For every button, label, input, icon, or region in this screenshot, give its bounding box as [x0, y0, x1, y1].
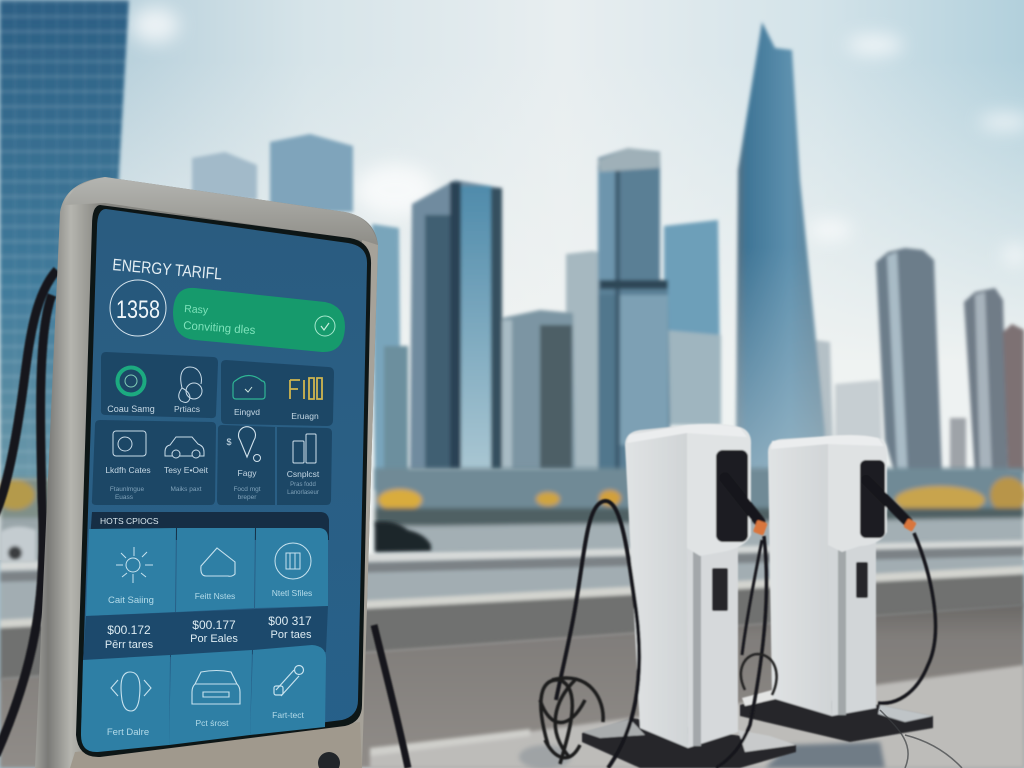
options panel lower: [81, 512, 329, 752]
horizon: trees and far ground: [0, 468, 1024, 564]
price row: [83, 606, 328, 660]
card: energy: [221, 360, 334, 426]
card: energy: Eingvd: [234, 407, 260, 417]
card: climate charges: Lkdfh Cates: [105, 465, 151, 475]
options header: [90, 512, 329, 540]
arched cable and coil: [556, 501, 639, 768]
socket slot: [716, 450, 748, 542]
rail shadow band: [0, 546, 1024, 582]
screen bezel: [76, 205, 371, 757]
price row: $00 317: [268, 614, 312, 628]
building: pale distant blocks: [192, 134, 966, 470]
small cable loop: [741, 654, 777, 695]
price row: Pērr tares: [105, 639, 154, 651]
charger casing: [35, 177, 378, 768]
price row: $00.177: [192, 618, 236, 632]
tower with glass facade: [410, 180, 502, 470]
card: pricing pin: Focd mgt: [233, 486, 261, 493]
icon: house: [201, 548, 235, 576]
lower body: [687, 545, 738, 748]
plug: [725, 478, 760, 522]
lower body: [828, 540, 876, 716]
deck between rail and wall: [0, 540, 1024, 630]
charger: left pedestal: [540, 424, 796, 768]
card: climate charges: Euass: [115, 494, 134, 501]
building: tall glass tower left: [0, 0, 129, 480]
card: capital: [277, 427, 332, 505]
city skyline: [0, 0, 1024, 490]
icon: wrench: [274, 666, 304, 696]
base: [582, 718, 796, 768]
options header: HOTS CPIOCS: [100, 516, 159, 526]
readout circle: [110, 280, 166, 336]
card: climate charges: Ftaunlmgue: [110, 486, 145, 493]
option row 1: Feitt Nstes: [195, 591, 235, 601]
option row 3: Fert Dalre: [107, 727, 149, 738]
option row 1: Ntetl Sfiles: [272, 588, 312, 598]
road: [0, 604, 1024, 768]
lower slot: [856, 562, 868, 598]
building: right towers: [876, 248, 1024, 485]
tariff cards upper: [92, 352, 334, 505]
pavement shadows: [519, 742, 885, 768]
rail top: [0, 540, 1024, 570]
socket slot: [860, 460, 885, 538]
wall cap: [0, 566, 1024, 628]
charger: right pedestal: [740, 435, 936, 742]
readout circle: 1358: [116, 296, 160, 324]
card: cost saving: [101, 352, 218, 418]
card: cost saving: Prtiacs: [174, 404, 200, 414]
card: capital: Pras fodd: [290, 482, 316, 488]
wall face: [0, 574, 1024, 680]
plug and cable: [866, 480, 908, 522]
card: climate charges: Maiks paxt: [170, 486, 202, 493]
option row 1: [86, 528, 328, 616]
screen: [81, 209, 367, 751]
lower slot: [712, 568, 728, 611]
card: cost saving: Coau Samg: [107, 404, 155, 414]
building: mid left towers: [372, 180, 600, 490]
green status pill: [173, 288, 345, 352]
main charger unit: [35, 177, 378, 768]
pavement: [370, 665, 1024, 768]
clouds: [131, 7, 1024, 265]
button: [318, 752, 340, 768]
card: pricing pin: $: [226, 437, 232, 447]
card: capital: Lanorlaseur: [287, 490, 319, 496]
building: spire skyscraper: [736, 22, 825, 472]
head: [687, 424, 751, 556]
card: pricing pin: breper: [238, 494, 257, 501]
card: pricing pin: Fagy: [238, 468, 257, 478]
black cables behind main charger: [0, 270, 408, 768]
title: ENERGY TARIFL: [112, 256, 223, 284]
option row 3: [81, 645, 326, 752]
price row: Por Eales: [190, 633, 238, 645]
icon: circle badge: [275, 543, 311, 579]
parked cars: [0, 521, 431, 562]
icon: car front: [192, 670, 240, 704]
guard rail and concrete wall: [0, 540, 1024, 680]
left face: [625, 425, 688, 748]
icon: sun: [116, 547, 153, 583]
base: [740, 690, 933, 742]
green status pill: Conviting dles: [183, 320, 256, 337]
option row 3: Pct śrost: [195, 718, 229, 728]
price row: $00.172: [107, 623, 151, 637]
option row 3: Fart-tect: [272, 710, 304, 720]
cable shadows on pavement: [880, 710, 962, 768]
card: climate charges: [92, 420, 216, 505]
option row 1: Cait Saiing: [108, 595, 154, 606]
icon: bulb outline: [111, 672, 151, 711]
green status pill: Rasy: [184, 303, 209, 317]
card: pricing pin: [217, 425, 275, 505]
head: [828, 435, 887, 552]
cable to ground: [716, 536, 766, 768]
card: climate charges: Tesy E•Oeit: [164, 465, 209, 475]
price row: Por taes: [271, 629, 312, 641]
building: central tower: [598, 148, 721, 480]
left face: [768, 436, 832, 716]
section label: TAIVS: [110, 352, 131, 361]
card: capital: Csnplcst: [287, 469, 320, 479]
card: energy: Eruagn: [291, 411, 319, 421]
